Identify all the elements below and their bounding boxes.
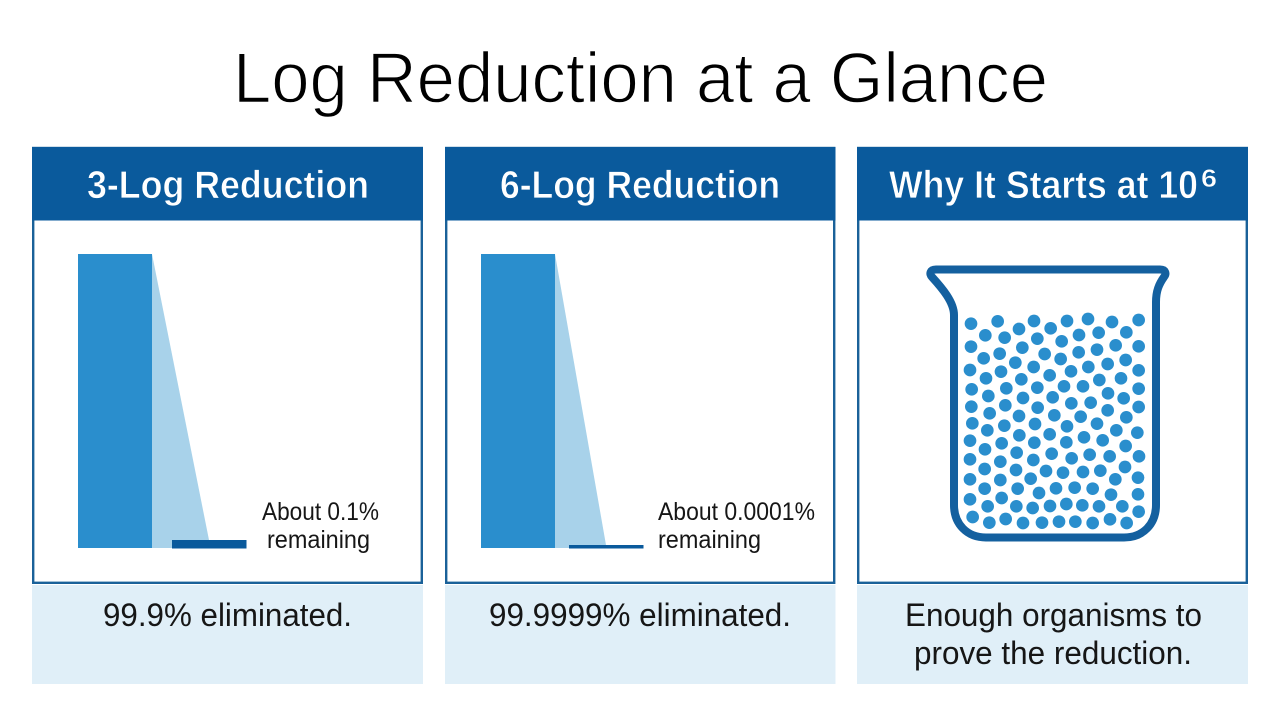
decline wedge [555,254,606,548]
caption band [32,585,423,684]
organism dots, upper [964,313,1145,405]
remaining label: remaining [658,526,761,554]
panel header bar [32,147,423,220]
panel header bar [857,147,1248,220]
caption text: 99.9% eliminated. [103,597,352,633]
beaker outline [930,270,1165,538]
caption band [857,585,1248,684]
starting bar [481,254,555,548]
starting bar [78,254,152,548]
panel heading: 6 [1201,165,1217,193]
caption text: Enough organisms to [905,597,1202,633]
panel heading: Why It Starts at 10 [889,164,1198,207]
caption text: prove the reduction. [914,635,1192,671]
caption text: 99.9999% eliminated. [489,597,791,633]
organism dots, lower [964,396,1145,529]
remaining bar [569,545,644,548]
panel frame [446,148,834,583]
caption band [445,585,836,684]
chart: 3-log decline [78,254,246,548]
panel: 3-log reduction [32,147,423,684]
icon: beaker of organisms [930,270,1165,538]
chart: 6-log decline [481,254,644,548]
panel frame [858,148,1247,583]
remaining label: remaining [267,526,370,554]
panel frame [33,148,422,583]
title: Log Reduction at a Glance [233,40,1048,118]
remaining label: About 0.0001% [658,498,815,526]
panel: 6-log reduction [445,147,836,684]
remaining label: About 0.1% [262,498,379,526]
remaining bar [172,540,246,548]
panel header bar [445,147,836,220]
panel: why it starts at 10^6 [857,147,1248,684]
decline wedge [152,254,209,548]
panel heading: 6-Log Reduction [500,164,780,207]
panel heading: 3-Log Reduction [87,164,369,207]
